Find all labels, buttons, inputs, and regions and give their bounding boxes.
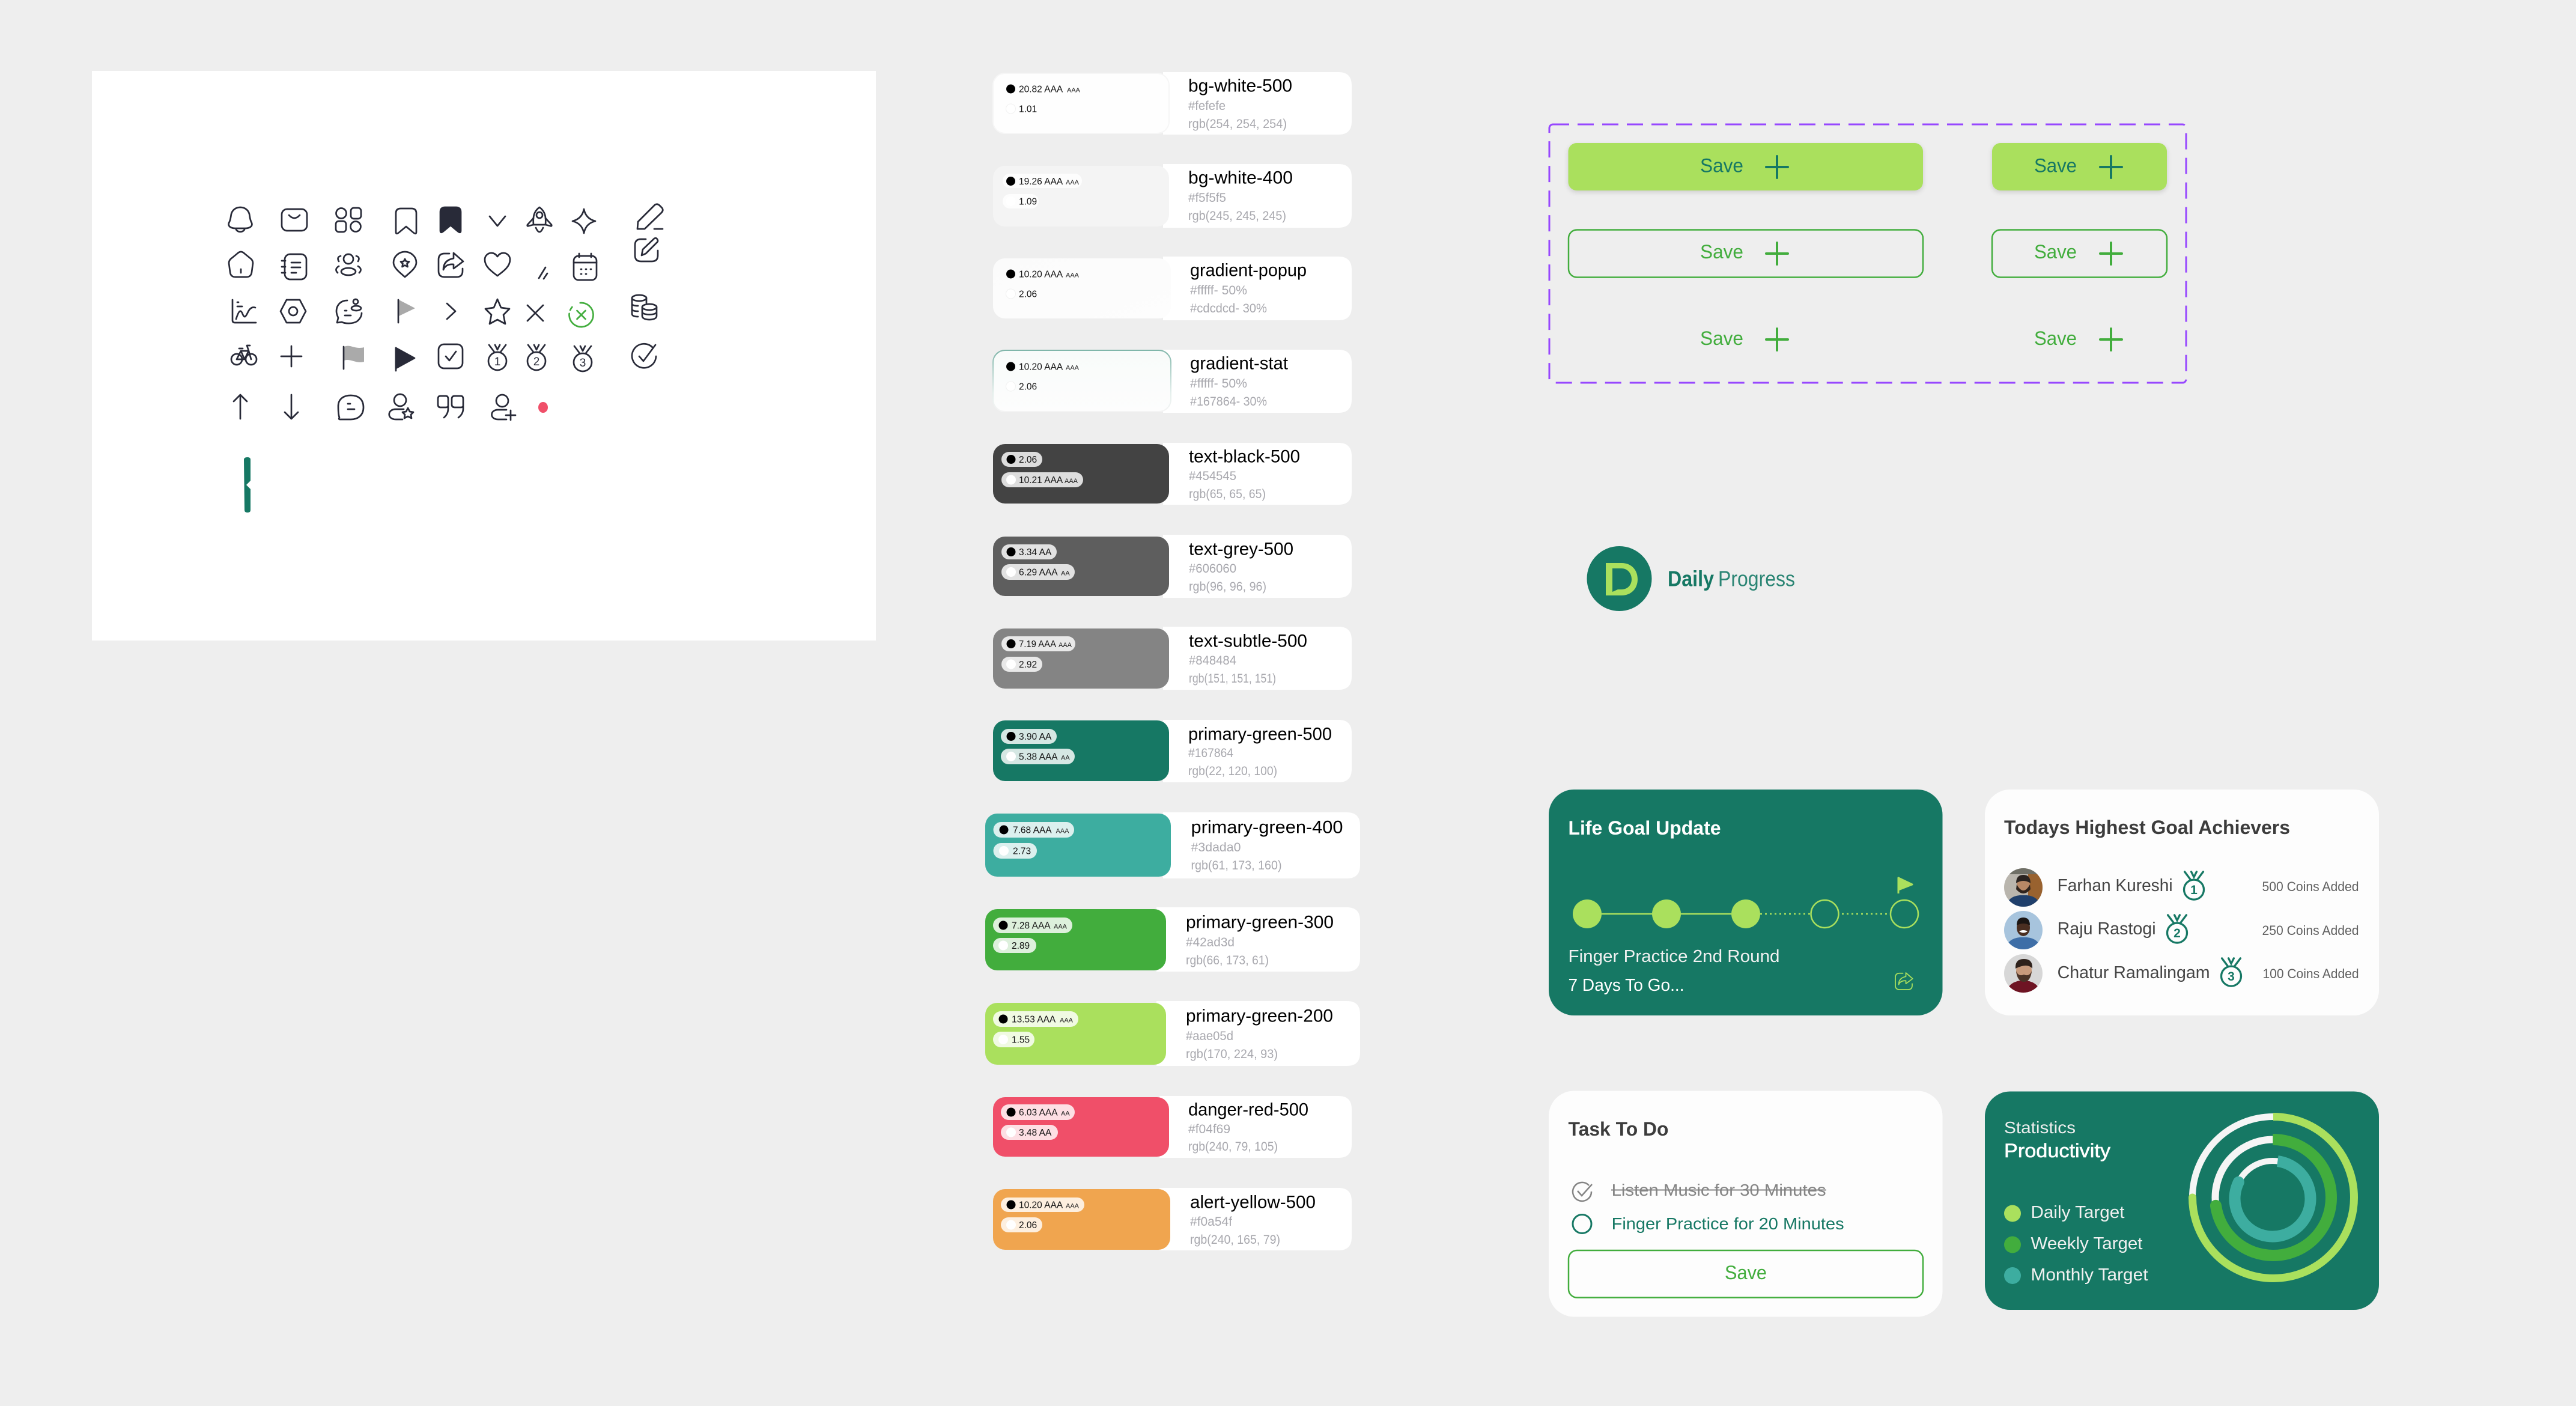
button: primary compact [1992,143,2167,190]
swatch: primary-green-400: #3dada0 [1191,841,1241,854]
icon: medal 3 [574,346,592,371]
icon: chat with person [336,299,362,323]
swatch: alert-yellow-500: #f0a54f [1190,1215,1232,1229]
card: task to do [1549,1091,1943,1317]
swatch: primary-green-400: AAA [1056,828,1069,835]
swatch: gradient-popup: #cdcdcd- 30% [1190,302,1267,315]
eyebrow: Statistics [2004,1118,2076,1137]
swatch: alert-yellow-500: 2.06 [1019,1220,1037,1231]
icon: grid [336,208,361,232]
swatch: primary-green-500: primary-green-500 [1188,725,1332,744]
achiever: Chatur Ramalingam: 3 [2228,970,2235,984]
swatch: gradient-popup: #fffff- 50% [1190,284,1247,297]
swatch: gradient-stat: AAA [1066,364,1080,371]
icon: star [485,299,509,324]
swatch: primary-green-200 [985,1001,1360,1066]
icon: bicycle [231,345,257,365]
avatar: Farhan [2004,868,2044,907]
achiever: Chatur Ramalingam: 100 Coins Added [2262,966,2359,981]
icon: black flag [396,348,415,371]
swatch: primary-green-200: primary-green-200 [1186,1006,1333,1026]
swatch: primary-green-400 [985,812,1360,878]
swatch: gradient-stat [993,350,1352,413]
legend: weekly target: Weekly Target [2031,1234,2142,1253]
swatch: gradient-popup: gradient-popup [1190,261,1307,280]
swatch: text-grey-500: 6.29 AAA [1019,567,1058,578]
icon: chat bubble [338,395,363,419]
swatch: bg-white-400 [993,164,1352,228]
swatch: primary-green-200: 1.55 [1012,1035,1030,1045]
swatch: primary-green-400: primary-green-400 [1191,817,1343,838]
button: text compact [2034,327,2122,350]
button: primary wide [1568,143,1923,190]
swatch: text-grey-500: #606060 [1189,562,1236,576]
icon: pencil [637,204,663,229]
icon: medal 2: 2 [533,356,539,368]
swatch: bg-white-400: 19.26 AAA [1019,177,1063,187]
swatch: text-black-500: rgb(65, 65, 65) [1189,487,1266,501]
avatar: Chatur [2004,954,2043,993]
icon: arrow up [234,395,247,419]
swatch: primary-green-400: rgb(61, 173, 160) [1191,859,1282,872]
swatch: bg-white-500 [993,72,1352,135]
swatch: primary-green-500: 3.90 AA [1019,732,1052,742]
panel: save button variants [1549,124,2186,383]
icon: bell [229,207,252,232]
task: completed: Listen Music for 30 Minutes [1612,1181,1826,1199]
icon: sparkle [573,209,595,233]
avatar: Raju [2004,911,2043,949]
icon: user with plus [491,395,515,420]
swatch: primary-green-300 [985,907,1360,972]
swatch: gradient-stat: 2.06 [1019,382,1037,392]
icon: slashes [539,267,547,279]
swatch: bg-white-500: 20.82 AAA [1019,84,1063,95]
icon: checkbox [439,344,463,368]
swatch: text-grey-500: 3.34 AA [1019,547,1052,558]
swatch: danger-red-500 [993,1096,1352,1158]
button: save: Save [1725,1262,1767,1283]
icon: close [527,305,543,321]
panel: icon library [92,71,876,641]
panel: colour swatches [985,72,1360,1250]
card: life goal update [1549,790,1943,1015]
swatch: bg-white-500: bg-white-500 [1188,76,1292,96]
icon: wavy grey flag [344,346,364,369]
swatch: alert-yellow-500 [993,1188,1352,1250]
swatch: primary-green-200: #aae05d [1186,1029,1233,1043]
icon: green cursor mark [244,457,251,513]
swatch: primary-green-500: #167864 [1188,746,1233,760]
icon: settings hexagon [281,300,306,323]
swatch: text-grey-500: rgb(96, 96, 96) [1189,580,1266,594]
swatch: gradient-popup: 2.06 [1019,290,1037,299]
achiever: Farhan Kureshi: 500 Coins Added [2262,879,2359,894]
swatch: alert-yellow-500: rgb(240, 165, 79) [1190,1233,1280,1247]
swatch: bg-white-400: AAA [1066,179,1080,186]
logo: Daily Progress: Progress [1718,566,1795,591]
logo: Daily Progress: Daily [1668,566,1714,591]
icon: user with star [389,394,413,419]
swatch: gradient-stat: #167864- 30% [1190,395,1267,409]
icon: house [229,252,253,277]
icon: medal 3: 3 [580,357,586,370]
button: text wide: Save [1700,327,1743,349]
achiever: Farhan Kureshi: Farhan Kureshi [2058,876,2173,895]
icon: check circle [632,344,656,368]
swatch: text-subtle-500: #848484 [1189,654,1236,668]
swatch: text-black-500: #454545 [1189,469,1236,483]
swatch: primary-green-400: 2.73 [1013,846,1031,857]
swatch: primary-green-300: AAA [1054,923,1068,930]
swatch: bg-white-400: rgb(245, 245, 245) [1188,209,1286,223]
achiever: Raju Rastogi [2058,915,2359,943]
icon: line chart [232,300,256,323]
swatch: text-subtle-500: AAA [1059,642,1072,649]
progress stepper [1573,899,1918,928]
swatch: alert-yellow-500: AAA [1066,1203,1080,1210]
swatch: primary-green-500: 5.38 AAA [1019,752,1058,762]
achiever: Raju Rastogi: 250 Coins Added [2262,923,2359,938]
button: text compact: Save [2034,327,2077,349]
swatch: bg-white-400: 1.09 [1019,197,1037,207]
swatch: gradient-stat: gradient-stat [1190,353,1289,374]
swatch: bg-white-400: bg-white-400 [1188,168,1293,187]
card: highest goal achievers [1985,790,2379,1015]
swatch: text-black-500: AAA [1065,478,1078,485]
icon: medal 2 [527,345,545,370]
achiever: Farhan Kureshi [2058,872,2359,899]
icon: quote [438,396,463,418]
heading: Todays Highest Goal Achievers [2004,817,2290,838]
icon: chevron right [447,303,455,319]
swatch: primary-green-500: rgb(22, 120, 100) [1188,764,1277,778]
icon: location pin [393,252,416,277]
swatch: bg-white-500: #fefefe [1188,99,1226,113]
icon: bookmark filled [440,207,461,233]
swatch: primary-green-300: #42ad3d [1186,936,1235,949]
swatch: alert-yellow-500: 10.20 AAA [1019,1201,1063,1210]
swatch: gradient-popup: AAA [1066,272,1080,279]
swatch: gradient-popup: 10.20 AAA [1019,269,1063,280]
swatch: danger-red-500: danger-red-500 [1188,1100,1308,1120]
icon: dashed cancel circle [568,302,594,328]
swatch: text-black-500 [993,443,1352,505]
button: primary wide: Save [1700,155,1743,177]
swatch: primary-green-400: 7.68 AAA [1013,826,1052,835]
swatch: primary-green-300: rgb(66, 173, 61) [1186,954,1269,967]
swatch: text-black-500: text-black-500 [1189,447,1300,466]
icon: plus [281,346,302,367]
swatch: text-grey-500: text-grey-500 [1189,540,1293,559]
swatch: primary-green-500: AA [1061,755,1070,762]
button: text wide [1700,327,1788,350]
icon: mail [282,209,307,231]
swatch: text-grey-500: AA [1061,570,1070,577]
swatch: primary-green-200: 13.53 AAA [1012,1014,1056,1025]
swatch: text-black-500: 10.21 AAA [1019,475,1063,485]
icon: arrow down [285,395,298,419]
button: primary compact: Save [2034,155,2077,177]
icon: heart [485,253,510,276]
achiever: Farhan Kureshi: 1 [2190,883,2198,897]
swatch: gradient-popup [993,257,1352,320]
task: open: Finger Practice for 20 Minutes [1612,1214,1844,1233]
swatch: text-black-500: 2.06 [1019,455,1037,465]
icon: notebook [282,254,306,279]
swatch: text-grey-500 [993,535,1352,598]
icon: people [336,254,361,275]
swatch: danger-red-500: 3.48 AA [1019,1128,1052,1138]
swatch: primary-green-300: primary-green-300 [1186,912,1334,933]
achiever: Chatur Ramalingam: Chatur Ramalingam [2058,963,2210,982]
legend: daily target: Daily Target [2031,1203,2124,1222]
swatch: bg-white-500: AAA [1067,87,1081,94]
heading: Life Goal Update [1568,817,1721,839]
icon: goal flag [1898,878,1912,893]
swatch: gradient-stat: #fffff- 50% [1190,377,1247,391]
swatch: primary-green-200: AAA [1060,1017,1074,1024]
swatch: alert-yellow-500: alert-yellow-500 [1190,1192,1316,1213]
achiever: Raju Rastogi: 2 [2174,927,2181,940]
days remaining: 7 Days To Go... [1568,976,1684,995]
icon: share [439,253,463,277]
button: save [1569,1250,1923,1298]
swatch: danger-red-500: #f04f69 [1188,1122,1230,1136]
swatch: primary-green-300: 7.28 AAA [1012,921,1051,931]
icon: red status dot [538,402,548,413]
icon: bookmark [396,208,416,234]
swatch: danger-red-500: rgb(240, 79, 105) [1188,1140,1278,1154]
logo: Daily Progress [1587,546,1795,611]
legend: monthly target: Monthly Target [2031,1265,2148,1285]
swatch: bg-white-400: #f5f5f5 [1188,191,1226,205]
swatch: bg-white-500: rgb(254, 254, 254) [1188,117,1287,131]
swatch: danger-red-500: 6.03 AAA [1019,1108,1058,1118]
achiever: Raju Rastogi: Raju Rastogi [2058,919,2156,939]
button: outline wide [1569,230,1923,278]
button: outline compact [1992,230,2167,278]
icon: medal 1: 1 [494,356,500,368]
swatch: text-subtle-500: 2.92 [1019,660,1037,670]
swatch: text-subtle-500: text-subtle-500 [1189,631,1307,651]
swatch: text-subtle-500 [993,627,1352,690]
swatch: primary-green-500 [993,720,1352,782]
swatch: primary-green-300: 2.89 [1012,941,1030,951]
icon: coins [632,295,657,320]
goal name: Finger Practice 2nd Round [1568,947,1779,966]
chart: concentric target rings [2189,1116,2354,1279]
icon: calendar [574,254,597,280]
swatch: bg-white-500: 1.01 [1019,105,1037,114]
icon: grey flag [398,300,415,323]
swatch: gradient-stat: 10.20 AAA [1019,362,1063,373]
icon: share [1895,973,1913,990]
icon: chevron down [490,216,505,226]
icon: rocket [527,207,551,232]
heading: Productivity [2004,1140,2110,1161]
button: outline compact: Save [2034,241,2077,263]
swatch: danger-red-500: AA [1061,1110,1070,1118]
swatch: primary-green-200: rgb(170, 224, 93) [1186,1047,1278,1061]
achiever: Chatur Ramalingam [2058,958,2359,986]
button: outline wide: Save [1700,241,1743,263]
swatch: text-subtle-500: 7.19 AAA [1019,639,1057,650]
icon: medal 1 [488,345,506,370]
card: productivity statistics [1985,1091,2379,1310]
icon: edit [635,238,658,261]
swatch: text-subtle-500: rgb(151, 151, 151) [1189,672,1276,686]
heading: Task To Do [1568,1118,1669,1140]
